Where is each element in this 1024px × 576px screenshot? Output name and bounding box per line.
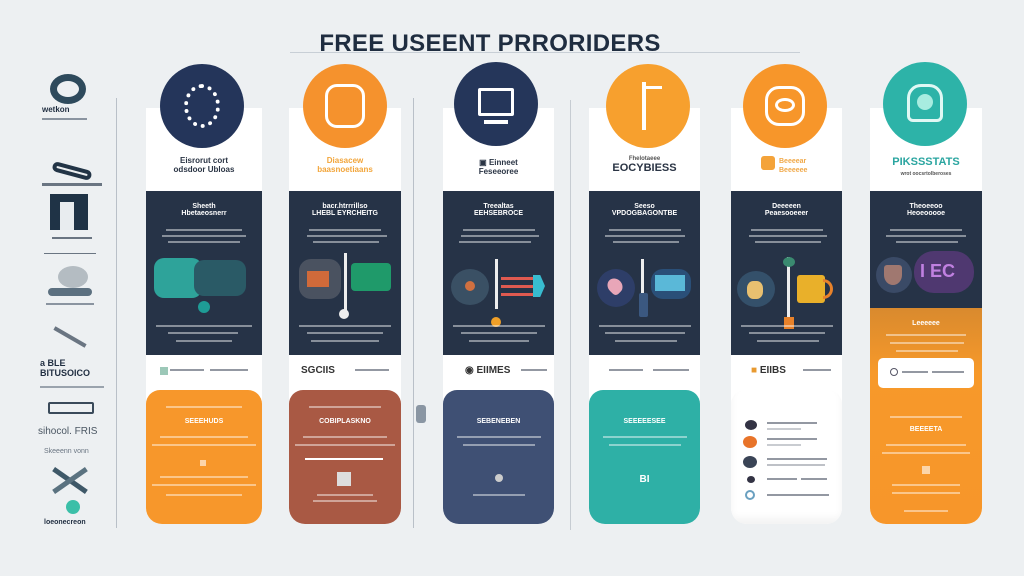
icon: pen	[53, 326, 87, 348]
panel: provider 2: LHEBL EYRCHEITG	[312, 210, 378, 217]
icon: doorway	[50, 194, 88, 230]
panel: provider 2: bacr.htrrrillso	[322, 203, 368, 210]
callout box	[878, 358, 974, 388]
icon: cloud	[58, 266, 88, 288]
panel: provider 6: Theoeeoo	[909, 203, 943, 210]
icon: circle 6	[883, 62, 967, 146]
panel: provider 4: Seeso	[634, 203, 655, 210]
icon: mic and card	[299, 259, 341, 299]
panel: provider 6: Leeeeee	[912, 320, 940, 327]
panel: provider 6: BEEEETA	[910, 426, 942, 433]
panel: provider 6: wrot oocsrtolberoses	[901, 171, 951, 177]
sidebar: icon list: Skeeenn vonn	[44, 448, 89, 455]
icon: circle 4	[606, 64, 690, 148]
panel: provider 4: Fhelotaeee	[629, 156, 660, 162]
icon: circle 2	[303, 64, 387, 148]
left sidebar line	[116, 98, 117, 528]
panel: provider 4: SEEEEESEE	[623, 418, 666, 425]
panel: provider 5: Deeeeen	[772, 203, 801, 210]
panel: provider 1: Eisrorut cort	[180, 156, 228, 165]
title: FREE USEENT PRRORIDERS	[319, 30, 661, 57]
icon: circle 3	[454, 62, 538, 146]
panel: provider 3: Treealtas	[483, 203, 514, 210]
panel: provider 3	[443, 108, 554, 524]
panel: provider 1: odsdoor Ubloas	[174, 165, 234, 174]
panel: provider 3: SEBENEBEN	[477, 418, 520, 425]
icon: circle 5	[743, 64, 827, 148]
icon: helmet	[50, 74, 86, 104]
panel: provider 4	[589, 108, 700, 524]
panel: provider 1	[146, 108, 262, 524]
panel: provider 6: PIKSSSTATS	[892, 156, 960, 168]
panel: provider 4: BI	[640, 474, 650, 485]
panel: provider 6: I EC	[920, 261, 955, 281]
sidebar: icon list: wetkon	[42, 105, 70, 114]
panel: provider 4: VPDOGBAGONTBE	[612, 210, 677, 217]
panel: provider 5: Beeeear	[779, 158, 806, 165]
panel: provider 3: ▣ Einneet	[479, 158, 518, 167]
icon: strap	[51, 161, 93, 181]
icon: flag chart	[451, 269, 489, 305]
panel: provider 2: Diasacew	[327, 156, 363, 165]
sidebar: icon list: loeonecreon	[44, 519, 86, 526]
sidebar: icon list: a BLE BITUSOICO	[40, 358, 90, 378]
panel: provider 5	[731, 108, 842, 524]
icon: heart and device	[597, 269, 635, 307]
panel: provider 2: SGCIIS	[301, 365, 335, 376]
sidebar: icon list: sihocol. FRIS	[38, 426, 97, 437]
panel: provider 5: Beeeeee	[779, 167, 807, 174]
panel: provider 6	[870, 108, 982, 524]
icon: shield and letters	[876, 257, 912, 293]
panel: provider 3: EEHSEBROCE	[474, 210, 523, 217]
panel: provider 2	[289, 108, 401, 524]
panel: provider 6: Heoeooooe	[907, 210, 945, 217]
panel: provider 1: SEEEHUDS	[185, 418, 223, 425]
icon: pin and box	[737, 271, 775, 307]
icon: media screens	[154, 258, 202, 298]
panel: provider 3: Feseeoree	[479, 167, 518, 176]
icon: battery	[48, 402, 94, 414]
panel: provider 1: Hbetaeosnerr	[181, 210, 227, 217]
panel: provider 1: Sheeth	[192, 203, 216, 210]
sidebar: icon list	[38, 74, 104, 526]
panel: provider 2: baasnoetiaans	[317, 165, 373, 174]
connector lines	[413, 98, 414, 528]
panel: provider 4: EOCYBIESS	[612, 162, 677, 174]
panel: provider 5: Peaesooeeer	[765, 210, 808, 217]
panel: provider 5: ■ EIIBS	[751, 365, 786, 376]
panel: provider 3: ◉ EIIMES	[465, 365, 510, 376]
panel: provider 2: COBIPLASKNO	[319, 418, 371, 425]
icon: circle 1	[160, 64, 244, 148]
icon: tools	[52, 467, 88, 494]
